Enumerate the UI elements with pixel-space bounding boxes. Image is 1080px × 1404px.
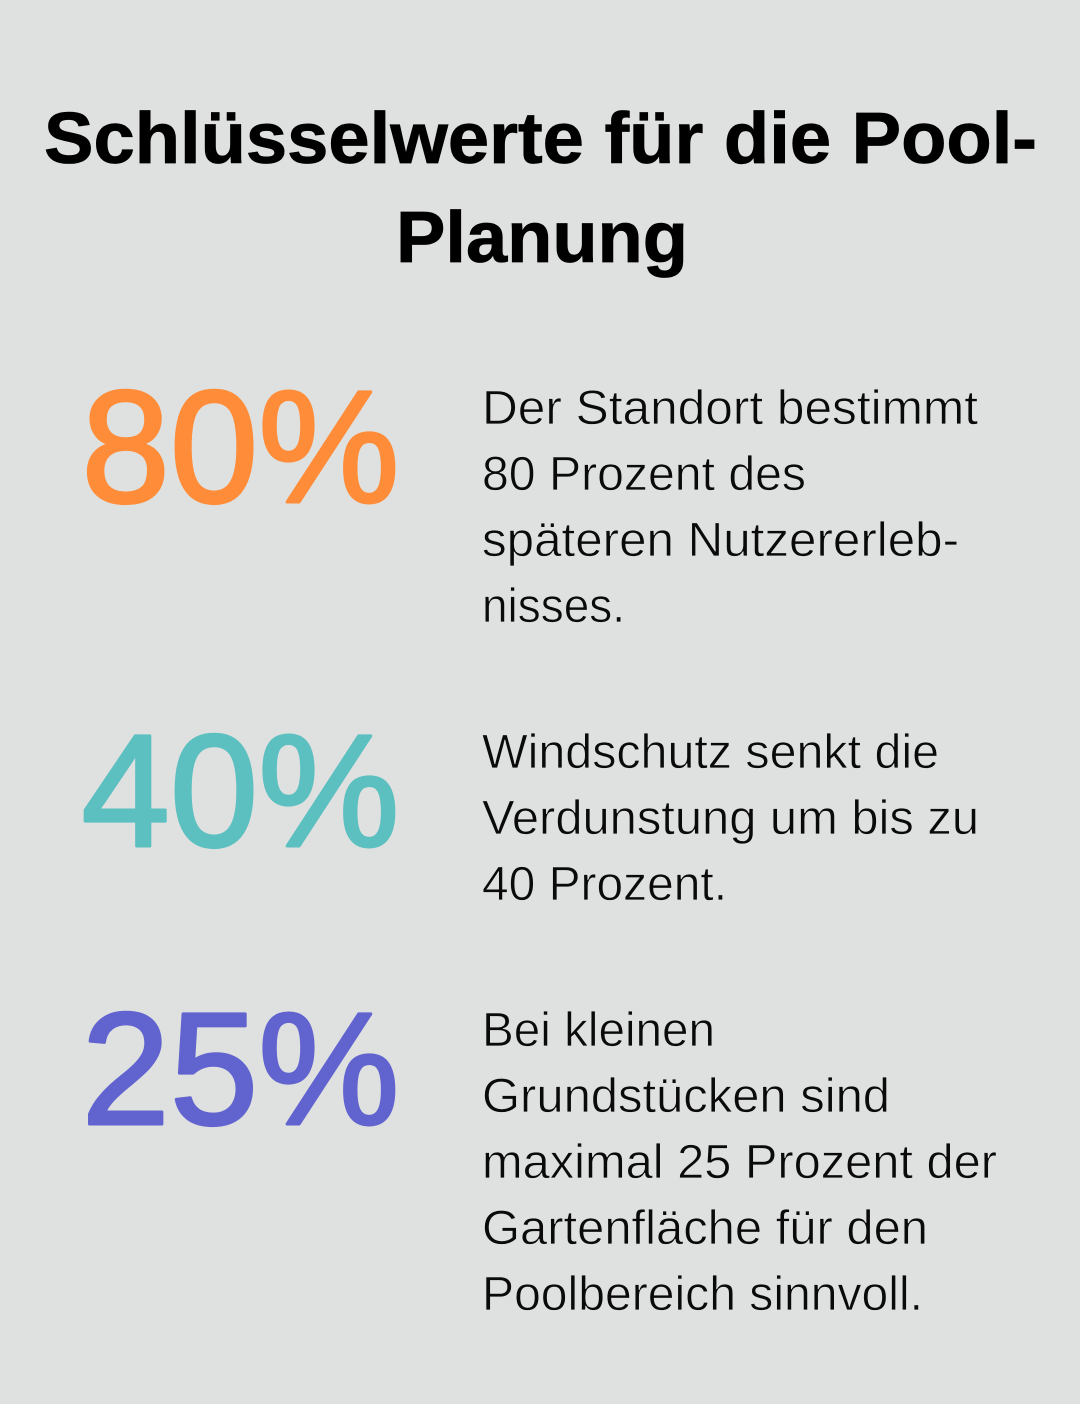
stat: 25% xyxy=(82,979,997,1321)
text: location: späteren Nutzererleb- xyxy=(482,514,959,567)
text: small plots: Bei kleinen xyxy=(482,1004,715,1057)
number: 40%: 40% xyxy=(82,701,400,880)
title: Planung xyxy=(396,198,688,278)
text: wind protection: 40 Prozent. xyxy=(482,858,727,911)
text: small plots: Poolbereich sinnvoll. xyxy=(482,1268,923,1321)
number: 80%: 80% xyxy=(82,357,400,536)
text: wind protection xyxy=(482,726,979,911)
title xyxy=(44,99,1037,278)
text: small plots xyxy=(482,1004,997,1321)
text: wind protection: Windschutz senkt die xyxy=(482,726,939,779)
stat: 80% xyxy=(82,357,978,633)
text: wind protection: Verdunstung um bis zu xyxy=(482,792,979,845)
text: small plots: maximal 25 Prozent der xyxy=(482,1136,997,1189)
number: 25%: 25% xyxy=(82,979,400,1158)
text: location xyxy=(482,382,978,633)
text: location: 80 Prozent des xyxy=(482,448,806,501)
stat: 40% xyxy=(82,701,979,911)
text: location: nisses. xyxy=(482,580,625,633)
text: small plots: Grundstücken sind xyxy=(482,1070,890,1123)
text: location: Der Standort bestimmt xyxy=(482,382,978,435)
text: small plots: Gartenfläche für den xyxy=(482,1202,928,1255)
title: Schlüsselwerte für die Pool- xyxy=(44,99,1037,179)
